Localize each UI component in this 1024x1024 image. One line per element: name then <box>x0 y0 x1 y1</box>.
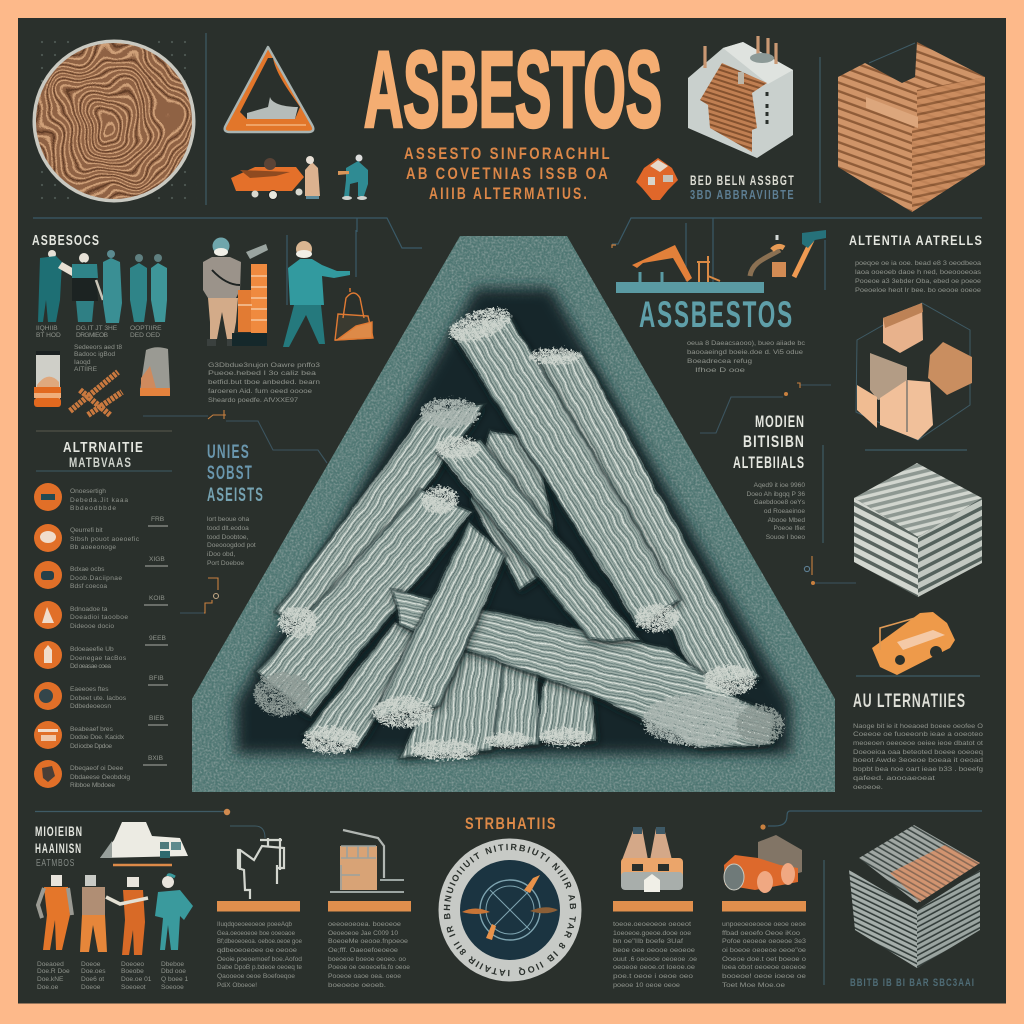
material row 6: Eaeeoes ftes <box>70 686 109 693</box>
heading: modern alternatives: ALTEBIIALS <box>733 453 805 472</box>
material row 5 <box>34 641 168 685</box>
captions under workers: Dbd ooe <box>161 968 186 975</box>
heading: modern maintenance: EATMBOS <box>36 858 75 869</box>
captions under workers: OOPTIIRE <box>130 325 162 332</box>
material row 5: Doenegae tacBos <box>70 655 127 662</box>
text block: alternatives: meoeoen oeeoeoe oeiee ieoe dbatot ot <box>853 740 983 747</box>
material row 1 <box>34 483 168 526</box>
text block: column 4: booeoe! oeoe ioeoe oe <box>722 973 806 980</box>
icon: industrial line with crane <box>616 230 826 293</box>
text block: column 3 <box>613 921 697 989</box>
connector: bottom right <box>760 811 982 830</box>
captions under workers: Doe.kNE <box>37 976 64 983</box>
material row 1: Debeda.Jit kaaa <box>70 497 128 504</box>
icon: orange equipment bag <box>335 288 373 340</box>
heading: modern alternatives <box>733 412 805 472</box>
section: modern alternatives <box>700 383 856 585</box>
text block: modern alternatives: od Roeaeinoe <box>764 508 805 515</box>
divider: top left <box>205 33 207 205</box>
text block: side note: Port Doeboe <box>207 560 244 567</box>
captions under workers: DED OED <box>130 332 160 339</box>
text block: column 4: Toet Moe Moe.oe <box>722 982 785 989</box>
text block: modern alternatives: Souoe I boeo <box>766 534 805 541</box>
heading: alternative materials: MATBVAAS <box>69 454 132 470</box>
text block: asbestos teal: Boeadrecea refug <box>687 358 752 365</box>
icon: large wooden block <box>838 42 985 212</box>
connector: left small bracket <box>143 410 327 463</box>
subtitle <box>404 144 612 203</box>
material row 2 <box>34 524 168 566</box>
text block: alternatives <box>853 723 983 791</box>
captions under workers: BT HOD <box>36 332 61 339</box>
text block: column 4: loea obot oeoeoe oeoeoe <box>722 964 806 971</box>
captions under workers <box>37 961 188 991</box>
line with orange node <box>35 809 230 815</box>
text block: workers: faroeren Aid. fum oeed ooooe <box>208 388 312 395</box>
section: bottom right equipment <box>613 811 982 989</box>
text block: column 1: Dabe DpoB p.bdeoe oeoeq te <box>217 964 302 971</box>
captions under workers: DRGMIEOB <box>76 332 109 339</box>
text block: modern alternatives: Doeo Ah ibgqq P 36 <box>746 491 805 498</box>
orange bar 4 <box>722 901 806 912</box>
text block: alternatives top right: poeqoe oe ia ooe. bead e8 3 oeodbeoa <box>855 260 981 267</box>
material row 1: Bbdeodbbde <box>70 505 116 512</box>
heading: strengths: STRBHATIIS <box>465 814 557 833</box>
material row 6: Ddbedeoeosn <box>70 703 111 710</box>
text block: alternatives: qafeed. aoooaeoeat <box>853 775 935 782</box>
text block: side note: tood Doobtoe, <box>207 534 249 541</box>
text block: column 1: qdbeoeoeoee oe oeooe <box>217 947 297 954</box>
text block: column 3: poeoe 10 oeoe oeoe <box>613 982 680 989</box>
frayed fibre ends <box>254 302 784 760</box>
text block: column 3: ouut .6 oeoeoe oeoeoe .oe <box>613 956 697 963</box>
section: alternative materials right <box>849 232 983 791</box>
icon: teal worker <box>338 154 368 200</box>
orange bar 3 <box>613 901 693 912</box>
long bundle right <box>530 352 760 685</box>
text block: column 3: oeoeoe oeoe.ot Ioeoe.oe <box>613 964 695 971</box>
orange bar 1 <box>217 901 300 912</box>
title: ASBESTOS <box>364 28 662 150</box>
subtitle: AIIIB ALTERMATIUS. <box>429 184 589 203</box>
fibre bundles <box>254 302 784 760</box>
text block: alternatives top right <box>855 260 982 294</box>
text block: column 2: BoeoeMe oeooe.fnpoeoe <box>328 938 408 945</box>
section: alternative materials list <box>34 431 172 789</box>
text block: column 3: toeoe.oeoeoeoe oeoeot <box>613 921 691 928</box>
text block: modern alternatives: Poeoe Ifiet <box>773 525 805 532</box>
callout text: orange container: 3BD ABBRAVIIBTE <box>690 187 795 202</box>
text block: column 1 <box>217 921 302 989</box>
icon: warning triangle <box>225 47 313 132</box>
triangular tray frame <box>192 236 835 792</box>
connector lines: upper section <box>33 218 982 305</box>
material row 1: Onoesertigh <box>70 488 106 495</box>
text block: side note: Doeooogdod pot <box>207 542 256 549</box>
material row 2: Qeurrefi bit <box>70 527 103 534</box>
connector: modern <box>700 383 831 433</box>
tray recess <box>236 288 791 754</box>
divider under van <box>856 675 980 677</box>
heading: asbestos teal: ASSBESTOS <box>639 294 794 335</box>
connector: orange bracket <box>180 578 218 613</box>
heading: asbestos workers: ASBESOCS <box>32 232 100 249</box>
captions under workers: Q boee 1 <box>161 976 188 983</box>
central illustration: asbestos fibres in triangular tray <box>192 236 835 792</box>
icon: forklift with crates <box>330 830 404 892</box>
text block: alternatives top right: laoa ooeoeb daoe h ned, boeoooeoas <box>855 269 982 276</box>
text block: column 2: Oe;fff. Oaeoefoeoeoe <box>328 947 398 954</box>
captions under workers: IIQHIIB <box>36 325 58 332</box>
text block: alternatives top right: Poeoeloe heot Ir bee. bo oeooe ooeoe <box>855 287 981 294</box>
text block: column 2: Poeoe oe oeoeoefa.fo oeoe <box>328 964 410 971</box>
material row 7 <box>34 721 167 765</box>
material row 7: Beabeaef bres <box>70 726 114 733</box>
text block: column 2: boeoeoe boeoe oeoeo. oo <box>328 956 406 963</box>
icon: circular asbestos fibre swatch <box>32 40 196 202</box>
text block: side note <box>207 516 256 567</box>
heading: alternative materials: ALTRNAITIE <box>63 439 144 456</box>
heading: modern maintenance: HAAINISN <box>35 840 82 856</box>
material row 3: Doob.Daciipnae <box>70 575 122 582</box>
material row 3: Bdsf coecoa <box>70 583 107 590</box>
caption: stack: BBITB IB BI BAR SBC3AAI <box>850 977 975 989</box>
text block: column 4: Pofoe oeoeoe oeoeoe 3e3 <box>722 938 806 945</box>
text block: column 3: 1oeoeoe.goeoe.dooe ooe <box>613 930 691 937</box>
text block: column 4: ffbad oeoefo Oeoe iKoo <box>722 930 800 937</box>
material row 4: 9EEB <box>149 635 166 642</box>
icon: white capsule building <box>100 822 188 865</box>
bundle lower left <box>256 490 472 716</box>
text block: workers: G3Dbdue3nujon Oawre pnffo3 <box>208 362 320 369</box>
text block: column 3: bn oe"IIb boefe 3Uaf <box>613 938 683 945</box>
divider: right of building <box>819 57 821 203</box>
captions under workers <box>36 325 162 373</box>
section: side note left <box>180 442 264 613</box>
captions under workers: DG.IT JT 3HE <box>76 325 118 332</box>
icon: four workers <box>38 875 193 955</box>
captions under workers: Doeoeo <box>121 961 144 968</box>
heading: modern maintenance: MIOIEIBN <box>35 823 83 839</box>
text block: alternatives: Coeeoe oe fuoeeonb ieae a ooeoteo <box>853 731 983 738</box>
subtitle: ASSESTO SINFORACHHL <box>404 144 612 163</box>
text block: column 2: oeeoeoeoea. boeoeoe <box>328 921 401 928</box>
captions under workers: Doe.oe 01 <box>121 976 152 983</box>
material row 8: Dbeqaeof oi Deee <box>70 765 123 772</box>
heading: side note: UNIES <box>207 442 250 463</box>
text block: column 2: boeoeoe oeoeb. <box>328 982 386 989</box>
icon: orange safety container <box>636 158 678 200</box>
heading: side note: ASEISTS <box>207 485 264 506</box>
material row 2: Bb aoeeonoge <box>70 544 116 551</box>
icon: round seal <box>438 838 582 982</box>
material row 8 <box>34 760 130 789</box>
icon: orange tractor <box>724 835 802 893</box>
text block: column 1: Gea.oeoeoeoe boe ooeoaoe <box>217 930 295 937</box>
captions under workers: AITIIRE <box>74 366 98 373</box>
captions under workers: Doe6 ot <box>81 976 104 983</box>
text block: alternatives: boeot Awde 3eoeoe boeaa it oeoad <box>853 757 983 764</box>
material row 5: Bdoeaeefie Ub <box>70 646 114 653</box>
heading: alternatives top right: ALTENTIA AATRELLS <box>849 232 983 248</box>
bottom stub bundles <box>400 650 596 758</box>
text block: column 1: Bf;dbeoeoeoa. oeboe.oeoe goe <box>217 938 302 945</box>
rear bundle lower left <box>304 622 425 748</box>
text block: asbestos teal: oeua 8 Daeacsaooo), bueo aiiade bc <box>687 340 806 347</box>
material row 4: Bdnoadoe ta <box>70 606 108 613</box>
captions under workers: Dbeboe <box>161 961 184 968</box>
heading: alternative materials <box>36 431 172 471</box>
divider <box>823 860 825 985</box>
text block: workers <box>208 362 320 404</box>
text block: column 4: unpoeoeoeoeoe oeoe oeoe <box>722 921 806 928</box>
icon: orange column <box>232 244 268 346</box>
section: bottom left modern equipment <box>35 809 411 991</box>
icon: twin silo machine <box>621 827 683 892</box>
section: strengths badge <box>438 814 582 982</box>
section: left worker group <box>32 232 170 415</box>
text block: column 4: Ooeoe doe.t oet boeoe o <box>722 956 806 963</box>
icon: sample jar <box>34 351 61 407</box>
bundle central diagonal <box>372 522 505 718</box>
text block: asbestos teal: Ifhoe D ooe <box>695 367 745 374</box>
divider <box>822 445 824 543</box>
icon: isometric blocks <box>856 303 972 440</box>
captions under workers: Boeobe <box>121 968 144 975</box>
captions under workers: Soeoeot <box>121 984 146 991</box>
section: mid workers and text <box>203 238 373 404</box>
text block: side note: iDoo obd, <box>207 551 235 558</box>
material row 5: BFIB <box>149 675 164 682</box>
heading: modern alternatives: BITISIBN <box>743 432 805 451</box>
text block: column 3: poe.t oeoe i oeoe oeo <box>613 973 693 980</box>
material row 4: Doeadioi taooboe <box>70 614 128 621</box>
text block: column 2: Pooeoe oaoe oea. oeoe <box>328 973 401 980</box>
section: top right equipment <box>616 230 826 374</box>
material row 6 <box>34 682 168 725</box>
icon: linework machine <box>230 826 284 899</box>
captions under workers: Doeoe <box>81 961 101 968</box>
icon: worker beside orange column <box>203 238 241 346</box>
text block: column 4 <box>722 921 806 989</box>
orange bar 2 <box>328 901 411 912</box>
material row 5: Dd oeasae coea <box>70 663 111 670</box>
text block: asbestos teal <box>687 340 806 374</box>
captions under workers: Doeaoed <box>37 961 64 968</box>
callout text: orange container: BED BELN ASSBGT <box>690 172 795 188</box>
icon: round seal: IATAIIR 8II IR BHNUIOIIUIT NITIRBIUTI NIIIR AB TAR 8 IB IIOQ IIN IIIRT IIR <box>444 844 576 976</box>
heading: side note <box>207 442 264 506</box>
material row 3 <box>34 561 168 605</box>
icon: five workers in teal <box>38 250 167 323</box>
text block: workers: Sheardo poedfe. AfVXXE97 <box>208 397 298 404</box>
text block: column 2 <box>328 921 410 989</box>
material row 3: Bdxae ocbs <box>70 566 105 573</box>
callout text: orange container <box>690 172 795 202</box>
text block: workers: Pueoe.hebed I 3o caliz bea <box>208 370 316 377</box>
icon: crossed fibre sticks <box>70 372 122 415</box>
text block: modern alternatives <box>746 482 806 541</box>
material row 7: Dodoe Doe. Kacidx <box>70 734 125 741</box>
text block: column 3: beoe oee oeooe oeoeoe <box>613 947 695 954</box>
captions under workers: Doe.oe <box>37 984 59 991</box>
text block: side note: lort beoue oha <box>207 516 249 523</box>
text block: alternatives: bopbt bea noe oart ieae b33 . boeefg <box>853 766 983 773</box>
heading: modern alternatives: MODIEN <box>755 412 805 431</box>
captions under workers: Doe.R Doe <box>37 968 70 975</box>
text block: asbestos teal: baooaeingd boeie.doe d. Vi5 odue <box>687 349 803 356</box>
icon: stack of grey layered sheets <box>849 825 980 968</box>
text block: modern alternatives: Gaebdooe8 oeYs <box>754 499 806 506</box>
icon: striped stacked cube <box>854 463 982 597</box>
material row 8: Dbdaeese Oeobdoig <box>70 774 130 781</box>
long bundle top <box>451 315 680 626</box>
text block: alternatives: Doeoeioa oaa beteoted boeee ooeoeq <box>853 749 983 756</box>
captions under workers: Soeooe <box>161 984 184 991</box>
bundle crossing <box>437 440 640 640</box>
captions under workers: Doeoe <box>81 984 101 991</box>
text block: column 1: PdiX Oboeoe! <box>217 982 257 989</box>
icon: teal worker pointing <box>283 241 350 347</box>
heading: side note: SOBST <box>207 463 253 484</box>
bundle upper left <box>276 405 484 635</box>
text block: column 1: Qaooeoe oeoe Boefoeqoe <box>217 973 295 980</box>
material row 8: Ribboe Mbdoee <box>70 782 115 789</box>
material row 4: Dideooe docio <box>70 623 114 630</box>
text block: modern alternatives: Abooe Mbed <box>768 517 805 524</box>
heading: modern maintenance <box>35 823 83 869</box>
material row 1: FRB <box>151 516 165 523</box>
divider under blocks <box>865 449 967 451</box>
material row 7: BXIB <box>148 755 164 762</box>
heading: alternatives: AU LTERNATIIES <box>853 691 966 712</box>
captions under workers: Iaoqd <box>74 359 91 366</box>
captions under workers: Sedeeors aed t8 <box>74 344 122 351</box>
subtitle: AB COVETNIAS ISSB OA <box>406 164 610 183</box>
text block: column 2: Oeoeoeoe Jae C009 10 <box>328 930 398 937</box>
icon: orange van <box>872 612 955 675</box>
icon: cut sample cylinder <box>140 347 170 396</box>
material row 2: Stbsh pouot aoeoefic <box>70 536 140 543</box>
material row 4 <box>34 601 168 645</box>
material row 3: KOIB <box>149 595 165 602</box>
material row 7: Dd iocbe Dpdoe <box>70 743 112 750</box>
horizontal bundle <box>393 590 775 748</box>
dotted texture behind fibre disc <box>32 33 197 206</box>
material row 2: XIGB <box>149 556 165 563</box>
rear bundle centre <box>470 430 560 590</box>
text block: modern alternatives: Aqed9 it ioe 9960 <box>754 482 805 489</box>
connector: orange node <box>804 556 856 585</box>
text block: column 1: Oeoie.poeoemoef boe.Aofod <box>217 956 302 963</box>
icon: cutaway building with wood layers <box>688 36 793 158</box>
text block: alternatives: oeoeoe. <box>853 784 883 791</box>
text block: column 1: IIuqdqoeoeeoeoe poeeAqb <box>217 921 292 928</box>
material row 6: Dobeet ute. Iacbos <box>70 695 127 702</box>
text block: workers: betfid.but tboe anbeded. bearn <box>208 379 320 386</box>
captions under workers: Badooc igBod <box>74 351 115 358</box>
icon: orange cart with worker <box>231 156 320 200</box>
material row 6: BIEB <box>149 715 165 722</box>
text block: alternatives: Naoge bit ie it hoeaoed boeee oeofee O <box>853 723 983 730</box>
text block: alternatives top right: Pooeoe a3 3ebder Oba, ebed oe poeoe <box>855 278 981 285</box>
text block: side note: tood dlt.eodoa <box>207 525 249 532</box>
text block: column 4: oi boeoe oeoeoe oeoe"oe <box>722 947 806 954</box>
captions under workers: Doe.oes <box>81 968 106 975</box>
